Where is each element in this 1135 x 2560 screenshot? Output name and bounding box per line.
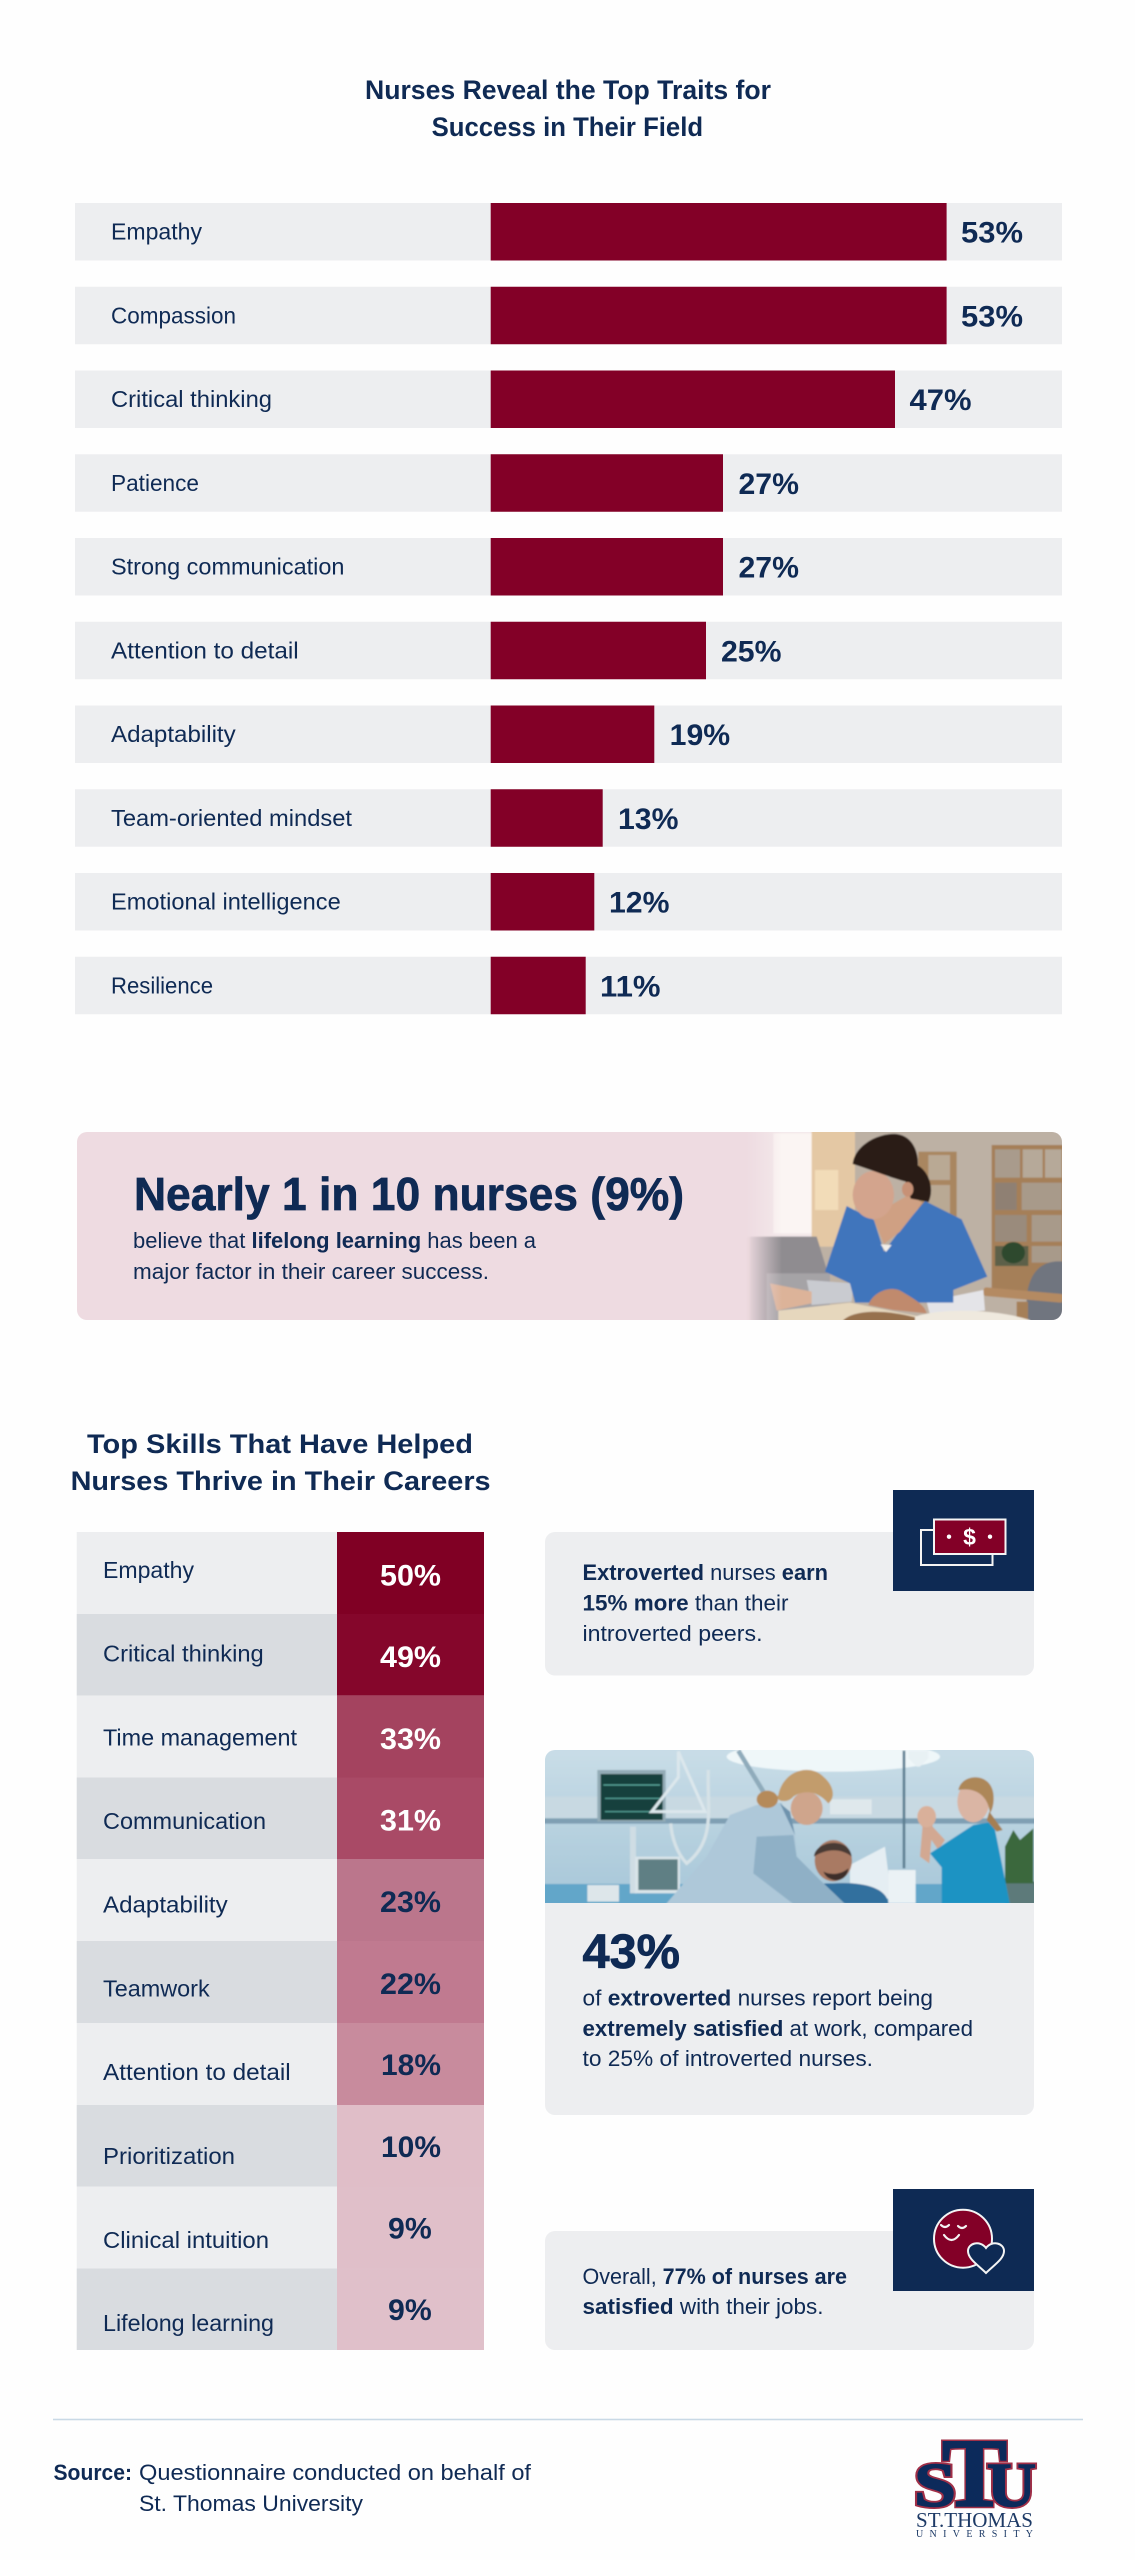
row: Lifelong learning 9% [77, 2268, 484, 2350]
logo: St. Thomas University: T [942, 2420, 1007, 2528]
source note [54, 2460, 532, 2516]
logo: St. Thomas University: U [987, 2452, 1036, 2520]
footer divider [53, 2419, 1083, 2420]
row: Critical thinking 47%: 47% [910, 384, 972, 417]
panel: overall satisfaction card [545, 2189, 1034, 2350]
logo: St. Thomas University: ST.THOMAS [916, 2508, 1033, 2532]
row: Communication 31%: 31% [380, 1804, 441, 1838]
row: Resilience 11%: Resilience [111, 972, 213, 998]
row: Patience 27%: Patience [111, 470, 199, 496]
row: Empathy 53% [75, 203, 1062, 260]
panel: lifelong learning callout [77, 1130, 1067, 1323]
row: Strong communication 27%: 27% [738, 552, 799, 584]
logo: St. Thomas University: S [914, 2452, 956, 2520]
row: Lifelong learning 9%: 9% [388, 2294, 432, 2327]
row: Critical thinking 49%: Critical thinking [103, 1640, 264, 1666]
row: Clinical intuition 9% [77, 2186, 484, 2268]
row: Resilience 11% [75, 957, 1062, 1014]
source note: Source: [54, 2460, 132, 2485]
logo: St. Thomas University: U [987, 2452, 1036, 2520]
row: Clinical intuition 9%: 9% [388, 2212, 432, 2246]
row: Empathy 53%: 53% [961, 216, 1023, 250]
row: Adaptability 23% [77, 1859, 484, 1941]
card text: Overall, 77% of nurses are [582, 2264, 847, 2289]
panel: extroverted earnings card [545, 1490, 1034, 1676]
source note: St. Thomas University [139, 2491, 363, 2516]
big stat: 43% [582, 1926, 680, 1979]
logo: St. Thomas University: S [914, 2452, 956, 2520]
callout body text: believe that lifelong learning has been a [133, 1228, 537, 1253]
row: Communication 31%: Communication [103, 1808, 266, 1834]
card text: satisfied with their jobs. [582, 2294, 824, 2319]
card text [582, 1986, 973, 2071]
photo: hospital room with patient and two clinicians [543, 1742, 1037, 1905]
row: Time management 33% [77, 1696, 484, 1778]
card text: extremely satisfied at work, compared [582, 2016, 973, 2041]
row: Clinical intuition 9%: Clinical intuition [103, 2227, 269, 2253]
row: Strong communication 27%: Strong communication [111, 554, 344, 580]
row: Attention to detail 25%: Attention to detail [111, 637, 299, 663]
callout body text: major factor in their career success. [133, 1259, 489, 1284]
row: Teamwork 22%: Teamwork [103, 1976, 210, 2002]
row: Patience 27%: 27% [738, 468, 799, 501]
row: Adaptability 19%: 19% [670, 719, 730, 752]
row: Empathy 50%: Empathy [103, 1557, 195, 1583]
panel: extroverted satisfaction card [543, 1742, 1037, 2115]
row: Attention to detail 25% [75, 622, 1062, 679]
photo: nurse reading a book [740, 1130, 1067, 1323]
row: Attention to detail 18% [77, 2023, 484, 2105]
icon: smiling face with heart [893, 2189, 1034, 2291]
row: Critical thinking 49% [77, 1614, 484, 1696]
callout headline: Nearly 1 in 10 nurses (9%) [134, 1168, 684, 1220]
row: Compassion 53%: 53% [961, 300, 1023, 333]
icon: money bills: $ [963, 1524, 976, 1550]
table title: Top Skills That Have Helped [87, 1429, 473, 1459]
card text [582, 1560, 828, 1646]
row: Adaptability 23%: 23% [380, 1886, 441, 1919]
row: Adaptability 23%: Adaptability [103, 1892, 228, 1918]
panel: top traits bar chart [75, 75, 1062, 1014]
row: Attention to detail 18%: Attention to detail [103, 2059, 291, 2085]
row: Critical thinking 47%: Critical thinking [111, 386, 272, 412]
row: Empathy 50%: 50% [380, 1560, 441, 1592]
row: Strong communication 27% [75, 538, 1062, 596]
row: Critical thinking 49%: 49% [380, 1641, 441, 1674]
row: Communication 31% [77, 1778, 484, 1859]
card text: Extroverted nurses earn [582, 1560, 828, 1585]
row: Adaptability 19%: Adaptability [111, 721, 236, 747]
row: Teamwork 22% [77, 1941, 484, 2023]
icon: money bills [893, 1490, 1034, 1591]
row: Team-oriented mindset 13% [75, 789, 1062, 847]
row: Attention to detail 18%: 18% [381, 2049, 441, 2082]
source note: Questionnaire conducted on behalf of [139, 2460, 532, 2485]
row: Time management 33%: 33% [380, 1723, 441, 1756]
logo: St. Thomas University: T [942, 2420, 1007, 2528]
row: Time management 33%: Time management [103, 1724, 298, 1750]
callout body text [133, 1228, 537, 1284]
row: Lifelong learning 9%: Lifelong learning [103, 2310, 274, 2336]
card text: to 25% of introverted nurses. [582, 2046, 873, 2071]
row: Attention to detail 25%: 25% [721, 635, 782, 668]
row: Teamwork 22%: 22% [380, 1968, 441, 2001]
row: Emotional intelligence 12%: 12% [609, 886, 670, 920]
row: Empathy 53%: Empathy [111, 218, 203, 244]
row: Adaptability 19% [75, 706, 1062, 763]
card text: of extroverted nurses report being [582, 1986, 933, 2010]
panel: top skills table [71, 1429, 491, 2350]
row: Patience 27% [75, 454, 1062, 512]
row: Compassion 53% [75, 287, 1062, 344]
row: Emotional intelligence 12%: Emotional intelligence [111, 888, 341, 914]
row: Emotional intelligence 12% [75, 873, 1062, 930]
card text [582, 2264, 847, 2319]
row: Prioritization 10%: 10% [381, 2131, 441, 2164]
row: Prioritization 10%: Prioritization [103, 2143, 235, 2169]
row: Team-oriented mindset 13%: 13% [618, 803, 678, 836]
logo: St. Thomas University: UNIVERSITY [916, 2529, 1033, 2540]
row: Empathy 50% [77, 1532, 484, 1614]
table title: Nurses Thrive in Their Careers [71, 1466, 491, 1496]
row: Team-oriented mindset 13%: Team-oriented mindset [111, 805, 353, 831]
chart title: Success in Their Field [432, 112, 703, 142]
row: Critical thinking 47% [75, 370, 1062, 428]
chart title: Nurses Reveal the Top Traits for [365, 75, 771, 105]
row: Resilience 11%: 11% [600, 970, 660, 1003]
row: Prioritization 10% [77, 2105, 484, 2186]
card text: 15% more than their [582, 1590, 788, 1616]
logo: St. Thomas University [914, 2420, 1036, 2540]
card text: introverted peers. [582, 1621, 762, 1646]
row: Compassion 53%: Compassion [111, 302, 236, 328]
